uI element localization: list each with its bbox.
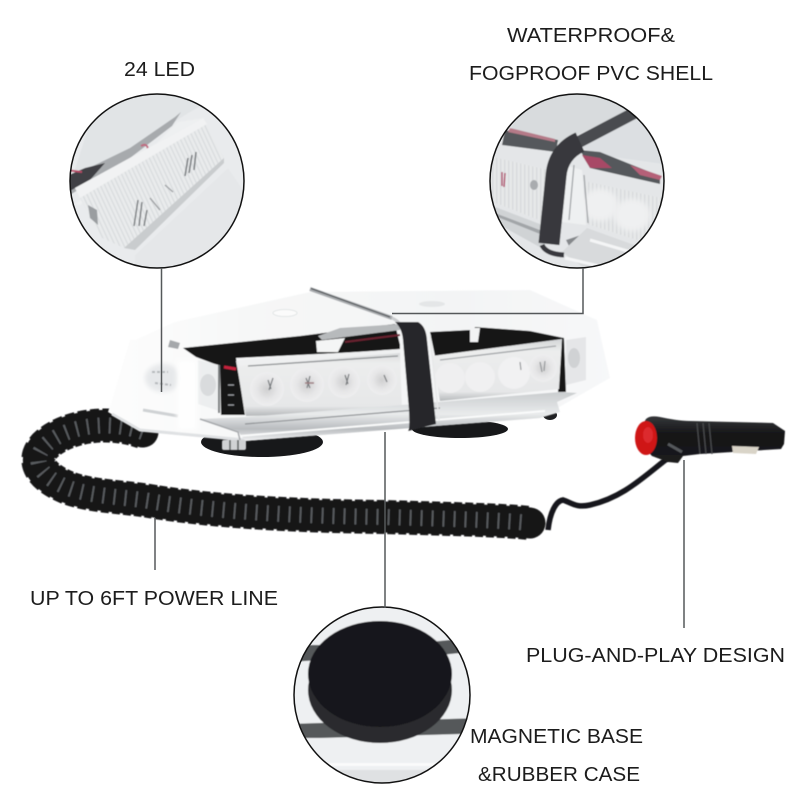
heading: 24 LED: 24 LED (124, 59, 195, 81)
left side faint LED (143, 340, 197, 430)
heading: waterproof and fogproof PVC shell (469, 25, 713, 85)
clear shell (108, 290, 610, 441)
callout line: 24 LED (160, 268, 162, 392)
magnifier circle: PVC strap (489, 93, 665, 269)
magnets under light bar (201, 410, 557, 457)
magnifier circle: LED module (69, 93, 245, 269)
plug blade (732, 446, 759, 454)
shell bottom lip (112, 414, 245, 440)
callout line: power line (154, 518, 156, 570)
coiled power cable (38, 425, 672, 530)
heading: plug and play: PLUG-AND-PLAY DESIGN (526, 645, 785, 667)
black strap (310, 288, 439, 431)
left LED module (236, 350, 402, 416)
red switch (635, 421, 657, 455)
heading: magnetic base and rubber case (470, 726, 643, 786)
left end module (198, 360, 219, 411)
heading: magnetic base and rubber case: &RUBBER CASE (478, 764, 640, 786)
magnifier circle: magnetic base (290, 605, 480, 785)
right LED module (432, 339, 562, 401)
heading: magnetic base and rubber case: MAGNETIC BASE (470, 726, 643, 748)
heading: waterproof and fogproof PVC shell: WATERPROOF& (507, 25, 676, 47)
callout line: plug (683, 460, 685, 628)
plug wire (548, 455, 672, 530)
shell top detail (273, 310, 297, 316)
clamp bolt (222, 440, 246, 450)
base rails (200, 392, 577, 441)
callout line: magnetic base (384, 432, 386, 608)
heading: waterproof and fogproof PVC shell: FOGPROOF PVC SHELL (469, 63, 713, 85)
callout line: PVC shell (392, 268, 583, 314)
heading: power line: UP TO 6FT POWER LINE (30, 588, 278, 610)
light bar unit (108, 288, 610, 450)
cigarette lighter plug (635, 416, 785, 463)
right end module (566, 337, 586, 385)
black interior (183, 324, 400, 415)
